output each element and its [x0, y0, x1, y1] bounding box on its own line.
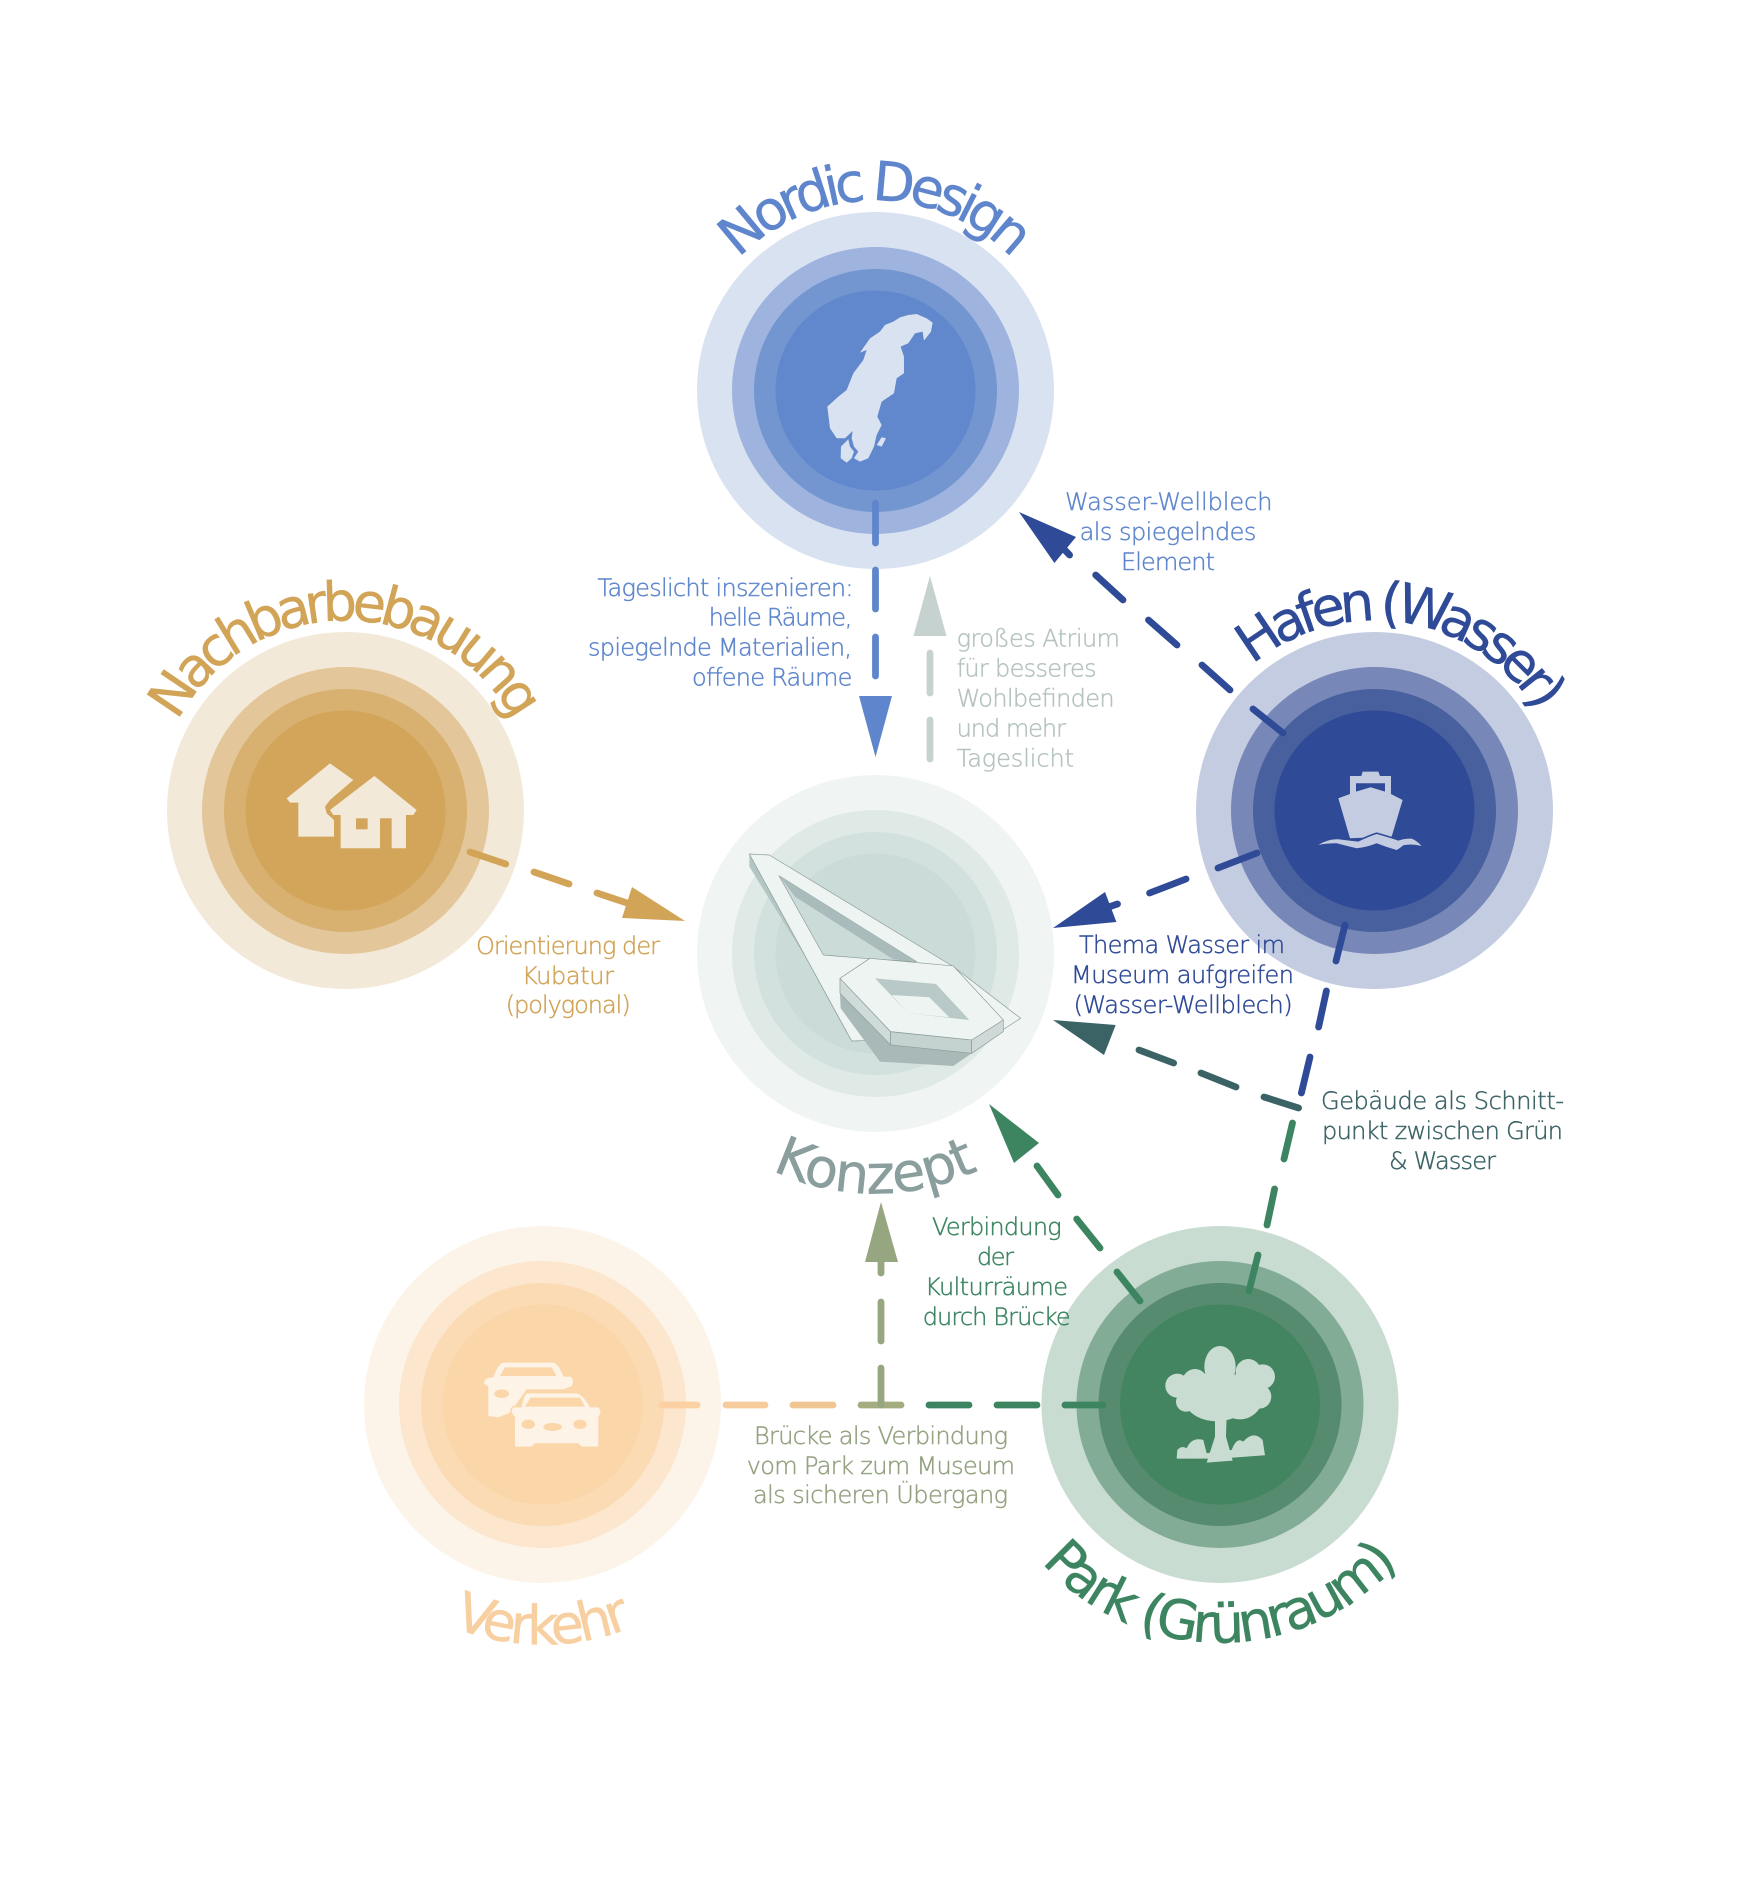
text: großes Atrium: und mehr: [957, 715, 1066, 743]
title: Verkehr: Verkehr: [464, 1590, 624, 1645]
text: Wasser-Wellblech als spiegelndes Element: als spiegelndes: [1080, 518, 1256, 546]
text: Orientierung der Kubatur: Kubatur: [522, 962, 614, 990]
text: Gebäude als Schnittpunkt: Gebäude als Schnitt-: [1321, 1087, 1564, 1115]
panel: Hafen: [1196, 632, 1553, 989]
text: Wasser-Wellblech als spiegelndes Element: Element: [1121, 548, 1215, 576]
icon: cars: [484, 1363, 600, 1447]
text: Thema Wasser: Museum aufgreifen: [1071, 961, 1294, 989]
arrow: Nachbarbebauung to Konzept: [470, 852, 685, 921]
arrow: Nordic Design to Konzept: [859, 503, 892, 757]
text: Thema Wasser: Thema Wasser im: [1079, 931, 1285, 959]
arrow: Hafen to Konzept: [1053, 853, 1257, 928]
arrow: Konzept up to Nordic Design: [914, 576, 946, 759]
arrow: bridge line Verkehr to Park: [662, 1402, 1103, 1408]
panel: Park: [1042, 1226, 1398, 1583]
text: Tageslicht inszenieren: Tageslicht inszenieren:: [598, 574, 854, 602]
text: großes Atrium: großes Atrium: [957, 625, 1120, 653]
panel: Verkehr: [364, 1226, 721, 1583]
panel: Konzept: [697, 775, 1054, 1132]
icon: building model: [749, 854, 1021, 1066]
text: Brücke als Verbindung: [747, 1422, 1015, 1509]
text: Orientierung der Kubatur: [476, 932, 660, 1019]
text: Gebäude als Schnittpunkt: & Wasser: [1389, 1147, 1496, 1175]
text: Orientierung der Kubatur: Orientierung der: [476, 932, 660, 960]
text: Verbindung der Kulturräume: Verbindung: [932, 1213, 1062, 1241]
arrow: bridge up to Konzept: [865, 1202, 898, 1405]
text: Tageslicht inszenieren: offene Räume: [692, 664, 852, 692]
text: Verbindung der Kulturräume: Kulturräume: [925, 1273, 1068, 1301]
icon: ship: [1318, 772, 1422, 850]
text: Tageslicht inszenieren: [588, 574, 854, 692]
text: großes Atrium: Tageslicht: [957, 745, 1074, 773]
text: großes Atrium: für besseres: [957, 655, 1097, 683]
title: Hafen (Wasser): Hafen (Wasser): [1234, 580, 1565, 706]
text: Verbindung der Kulturräume: der: [977, 1243, 1014, 1271]
text: Wasser-Wellblech als spiegelndes Element: [1065, 488, 1272, 576]
text: Brücke als Verbindung: als sicheren Übergang: [753, 1479, 1008, 1509]
text: Orientierung der Kubatur: (polygonal): [506, 991, 631, 1019]
arrow: Park to Konzept: [989, 1104, 1140, 1301]
title: Park (Grünraum): Park (Grünraum): [1044, 1538, 1396, 1644]
icon: houses: [287, 763, 417, 848]
text: Verbindung der Kulturräume: [923, 1213, 1071, 1331]
title: Konzept: Konzept: [776, 1136, 978, 1198]
text: Wasser-Wellblech als spiegelndes Element: Wasser-Wellblech: [1065, 488, 1272, 516]
text: Brücke als Verbindung: Brücke als Verbindung: [754, 1422, 1008, 1450]
text: Gebäude als Schnittpunkt: punkt zwischen Grün: [1322, 1117, 1563, 1145]
icon: tree: [1165, 1346, 1275, 1463]
arrow: Hafen to Park link: [1249, 925, 1345, 1291]
text: Thema Wasser: [1071, 931, 1294, 1019]
arrow: Schnittpunkt to Konzept: [1053, 1020, 1299, 1108]
text: Brücke als Verbindung: vom Park zum Museum: [747, 1452, 1015, 1480]
text: Verbindung der Kulturräume: durch Brücke: [923, 1303, 1071, 1331]
panel: Nordic Design: [697, 212, 1054, 569]
text: großes Atrium: Wohlbefinden: [957, 685, 1115, 713]
text: Thema Wasser: (Wasser-Wellblech): [1074, 991, 1293, 1019]
panel: Nachbarbebauung: [167, 632, 524, 989]
text: Tageslicht inszenieren: spiegelnde Materialien,: [588, 634, 852, 662]
text: Gebäude als Schnittpunkt: [1321, 1087, 1564, 1175]
title: Nordic Design: Nordic Design: [716, 160, 1026, 256]
arrow: Hafen to Nordic Design: [1019, 512, 1283, 733]
text: Tageslicht inszenieren: helle Räume,: [709, 604, 852, 632]
icon: Scandinavia map: [827, 314, 933, 463]
text: großes Atrium: [957, 625, 1120, 773]
title: Nachbarbebauung: Nachbarbebauung: [146, 580, 536, 718]
